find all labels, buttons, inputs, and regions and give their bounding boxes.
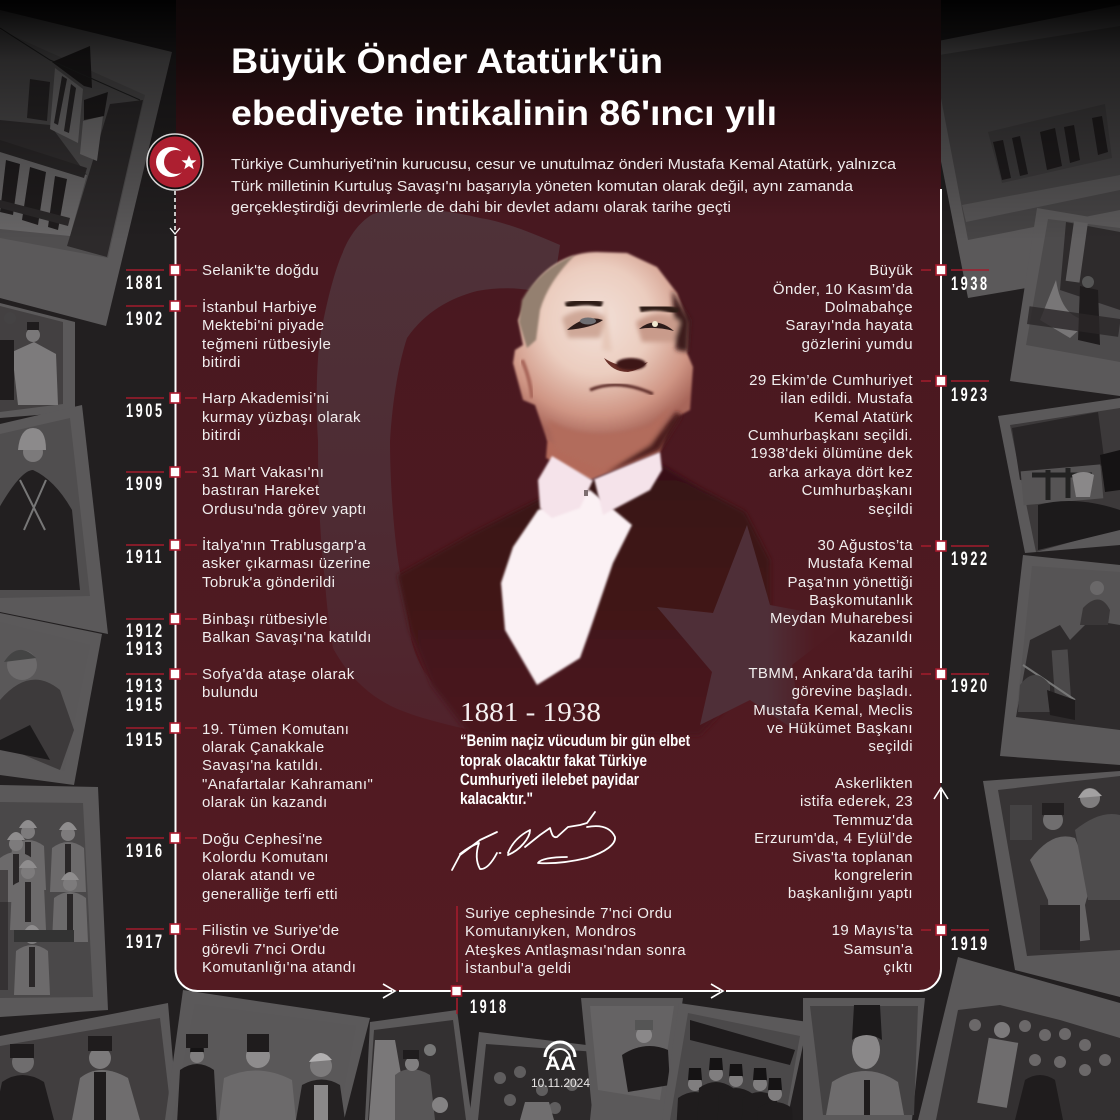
event 1913-1915: 1915 xyxy=(126,694,165,716)
photo collage: right column xyxy=(918,5,1120,1120)
title: ebediyete intikalinin 86'ıncı yılı xyxy=(231,94,777,133)
event 1923: Cumhurbaşkanı seçildi. xyxy=(748,427,913,444)
event 1916: generalliğe terfi etti xyxy=(202,886,338,903)
event 1918: İstanbul'a geldi xyxy=(465,959,571,977)
flag watermark: crescent xyxy=(317,209,560,736)
event 1913-1915: 1913 xyxy=(126,675,165,697)
event 1881 xyxy=(126,262,319,294)
event 1919: çıktı xyxy=(883,959,913,976)
event 1912-1913: 1913 xyxy=(126,638,165,660)
event 1909: 1909 xyxy=(126,473,165,495)
event 1902: bitirdi xyxy=(202,354,241,371)
event 1917: Komutanlığı'na atandı xyxy=(202,959,356,976)
photo collage: left column xyxy=(0,10,178,1120)
timeline right column xyxy=(748,262,990,976)
event 1902 xyxy=(126,298,331,371)
event 1905 xyxy=(126,390,361,444)
photo: man with pith helmet xyxy=(0,405,108,634)
event 1916: Kolordu Komutanı xyxy=(202,849,329,866)
event 1881: Selanik'te doğdu xyxy=(202,262,319,279)
event 1922 xyxy=(770,537,990,646)
event 1917: Filistin ve Suriye'de xyxy=(202,922,340,939)
event 1916: olarak atandı ve xyxy=(202,867,315,884)
quote: kalacaktır." xyxy=(460,789,533,808)
event 1911: 1911 xyxy=(126,546,164,568)
logo: Anadolu Agency xyxy=(545,1042,576,1075)
event 1919 xyxy=(832,922,990,976)
event 1881: 1881 xyxy=(126,272,165,294)
event 1902: İstanbul Harbiye xyxy=(202,298,317,316)
event 1917 xyxy=(126,922,356,976)
quote xyxy=(460,731,690,808)
event 1938 xyxy=(773,262,990,353)
event 1913-1915: bulundu xyxy=(202,684,258,701)
event 1919 congresses: kongrelerin xyxy=(834,867,913,884)
event 1913-1915: Sofya'da ataşe olarak xyxy=(202,666,355,683)
hair xyxy=(519,255,575,348)
photo: ceremony xyxy=(998,398,1120,553)
event 1912-1913: 1912 xyxy=(126,620,165,642)
event 1911: Tobruk'a gönderildi xyxy=(202,574,335,591)
event 1923: 1923 xyxy=(951,384,990,406)
event 1916: Doğu Cephesi'ne xyxy=(202,831,323,848)
jacket xyxy=(398,465,770,735)
event 1919 congresses: Temmuz'da xyxy=(833,812,913,829)
event 1915: "Anafartalar Kahramanı" xyxy=(202,776,373,793)
event 1905: 1905 xyxy=(126,400,165,422)
event 1915: 19. Tümen Komutanı xyxy=(202,721,349,738)
event 1922: kazanıldı xyxy=(849,629,913,646)
event 1920: ve Hükümet Başkanı xyxy=(767,720,913,737)
event 1911: İtalya'nın Trablusgarp'a xyxy=(202,536,366,554)
event 1938: Önder, 10 Kasım’da xyxy=(773,280,913,298)
facial shading xyxy=(548,290,690,474)
event 1923: ilan edildi. Mustafa xyxy=(780,390,913,407)
photo: guards and wreaths xyxy=(1010,208,1120,396)
event 1920: 1920 xyxy=(951,675,990,697)
title xyxy=(231,42,777,133)
event 1915 xyxy=(126,721,373,811)
event 1923: Kemal Atatürk xyxy=(814,409,913,426)
timeline track xyxy=(170,189,948,998)
photo: group with veiled man xyxy=(365,1010,472,1120)
event 1915: olarak Çanakkale xyxy=(202,739,325,756)
event 1923: arka arkaya dört kez xyxy=(769,464,913,481)
photo: crowd of officers xyxy=(918,957,1120,1120)
event 1938: 1938 xyxy=(951,273,990,295)
intro paragraph: gerçekleştirdiği devrimlerle de dahi bir devlet adamı olarak tarihe geçti xyxy=(231,200,731,216)
red central panel xyxy=(176,0,941,991)
intro paragraph: Türkiye Cumhuriyeti'nin kurucusu, cesur ve unutulmaz önderi Mustafa Kemal Atatürk, yalnızca xyxy=(231,157,897,173)
event 1919: 1919 xyxy=(951,933,990,955)
event 1915: olarak ün kazandı xyxy=(202,794,328,811)
life dates: 1881 - 1938 xyxy=(460,697,601,727)
event 1922: Meydan Muharebesi xyxy=(770,610,913,627)
event 1920: seçildi xyxy=(868,738,913,755)
top vignette over photos xyxy=(0,0,1120,240)
event 1919: Samsun'a xyxy=(843,941,913,958)
photo collage: bottom row xyxy=(165,990,925,1120)
event 1918: Ateşkes Antlaşması'ndan sonra xyxy=(465,942,686,959)
event 1920: TBMM, Ankara'da tarihi xyxy=(748,665,913,682)
event 1919 congresses: Askerlikten xyxy=(835,775,913,792)
photo: seated crowd xyxy=(469,1032,603,1120)
event 1923: 1938'deki ölümüne dek xyxy=(750,445,913,462)
photo: soldier with helmet xyxy=(0,613,102,785)
collar xyxy=(538,452,662,518)
event 1915: 1915 xyxy=(126,729,165,751)
quote: Cumhuriyeti ilelebet payidar xyxy=(460,770,639,789)
event 1917: 1917 xyxy=(126,931,165,953)
event 1920: Mustafa Kemal, Meclis xyxy=(753,702,913,719)
event 1919 congresses: Erzurum'da, 4 Eylül’de xyxy=(754,830,913,847)
photo: officer in fez xyxy=(0,303,75,418)
event 1918: Suriye cephesinde 7'nci Ordu xyxy=(465,905,672,922)
event 1919 congresses: başkanlığını yaptı xyxy=(788,885,913,902)
photo: officers group xyxy=(0,785,108,1017)
photo: men walking xyxy=(983,771,1120,997)
event 1920: görevine başladı. xyxy=(792,683,913,700)
event 1909 xyxy=(126,464,367,518)
event 1922: 1922 xyxy=(951,548,990,570)
event 1922: Başkomutanlık xyxy=(809,592,913,609)
photo: officer with straps xyxy=(581,998,683,1120)
title: Büyük Önder Atatürk'ün xyxy=(231,42,663,81)
event 1912-1913: Balkan Savaşı'na katıldı xyxy=(202,629,372,646)
shirt front xyxy=(501,490,632,685)
photo: men in suits xyxy=(662,1003,808,1120)
event 1905: Harp Akademisi’ni xyxy=(202,390,329,407)
event 1923: seçildi xyxy=(868,501,913,518)
event 1902: Mektebi'ni piyade xyxy=(202,317,325,334)
photo: mausoleum xyxy=(918,5,1120,298)
event 1919 congresses xyxy=(754,775,913,902)
event 1919: 19 Mayıs’ta xyxy=(832,922,913,939)
icon: Turkish flag badge xyxy=(147,134,203,190)
event 1902: 1902 xyxy=(126,308,165,330)
intro paragraph xyxy=(231,157,897,216)
photo: house xyxy=(0,10,172,326)
photo: portrait in kalpak xyxy=(803,998,925,1120)
event 1916: 1916 xyxy=(126,840,165,862)
intro paragraph: Türk milletinin Kurtuluş Savaşı'nı başarıyla yöneten komutan olarak değil, aynı zamanda xyxy=(231,179,854,195)
photo: two men xyxy=(0,1003,178,1120)
event 1909: Ordusu'nda görev yaptı xyxy=(202,501,367,518)
neck xyxy=(546,418,672,480)
event 1909: 31 Mart Vakası'nı xyxy=(202,464,324,481)
event 1920 xyxy=(748,665,990,755)
event 1923 xyxy=(748,372,990,518)
event 1918 xyxy=(452,905,686,1018)
logo: Anadolu Agency: AA xyxy=(545,1054,576,1075)
quote: “Benim naçiz vücudum bir gün elbet xyxy=(460,731,690,750)
event 1917: görevli 7'nci Ordu xyxy=(202,941,326,958)
event 1912-1913 xyxy=(126,611,372,660)
event 1938: Dolmabahçe xyxy=(825,299,913,316)
bow tie detail xyxy=(584,490,588,496)
facial features xyxy=(522,302,678,398)
portrait of Atatürk xyxy=(398,252,850,735)
timeline left column xyxy=(126,262,373,976)
date: 10.11.2024 xyxy=(531,1076,590,1090)
event 1911 xyxy=(126,536,371,591)
event 1915: Savaşı'na katıldı. xyxy=(202,757,323,774)
event 1916 xyxy=(126,831,338,903)
quote: toprak olacaktır fakat Türkiye xyxy=(460,751,647,770)
flag watermark: star xyxy=(657,525,850,735)
event 1909: bastıran Hareket xyxy=(202,482,320,499)
event 1923: 29 Ekim’de Cumhuriyet xyxy=(749,372,913,389)
event 1922: 30 Ağustos’ta xyxy=(817,537,913,554)
event 1905: bitirdi xyxy=(202,427,241,444)
event 1938: Sarayı'nda hayata xyxy=(785,317,913,334)
event 1922: Mustafa Kemal xyxy=(807,555,913,572)
head xyxy=(513,252,693,458)
event 1913-1915 xyxy=(126,666,355,716)
event 1938: gözlerini yumdu xyxy=(802,336,913,353)
event 1923: Cumhurbaşkanı xyxy=(802,482,913,499)
event 1922: Paşa'nın yönettiği xyxy=(787,574,913,591)
event 1911: asker çıkarması üzerine xyxy=(202,555,371,572)
event 1919 congresses: Sivas'ta toplanan xyxy=(792,849,913,866)
event 1902: teğmeni rütbesiyle xyxy=(202,336,331,353)
signature xyxy=(452,812,615,870)
event 1918: Komutanıyken, Mondros xyxy=(465,923,636,940)
photo: parliament speaker xyxy=(1000,555,1120,765)
event 1912-1913: Binbaşı rütbesiyle xyxy=(202,611,328,628)
event 1938: Büyük xyxy=(869,262,913,279)
photo: men in robes xyxy=(165,990,370,1120)
event 1919 congresses: istifa ederek, 23 xyxy=(800,793,913,810)
event 1905: kurmay yüzbaşı olarak xyxy=(202,409,361,426)
event 1918: 1918 xyxy=(470,996,509,1018)
